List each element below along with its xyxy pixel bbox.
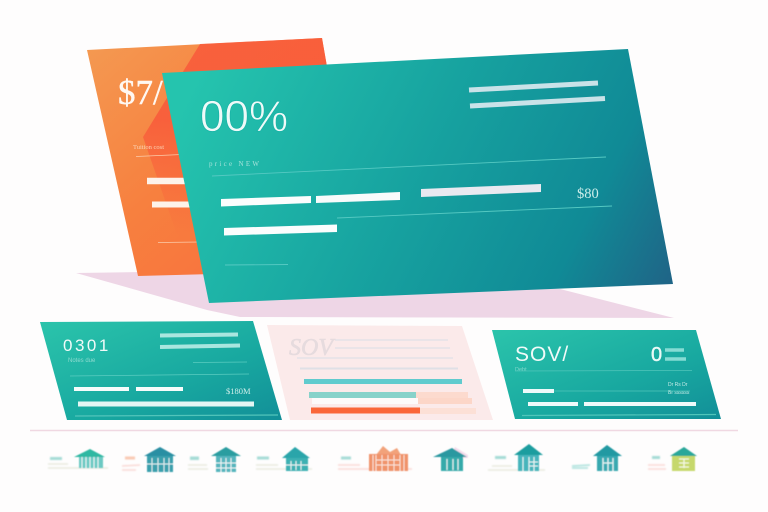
- pink floor shadow: [76, 271, 674, 318]
- orange card bars: [136, 154, 200, 242]
- icon: orange building 5: [369, 446, 408, 471]
- orange card price: $7/: [118, 73, 163, 112]
- icon row: houses: [74, 444, 697, 472]
- right card side value: 0: [651, 344, 662, 366]
- baseline divider: [30, 430, 738, 432]
- left card caption: Notes due: [68, 358, 96, 364]
- panel: pale pink card middle: [267, 325, 493, 420]
- main card percent value: 00%: [200, 92, 288, 141]
- left card dividers: [70, 362, 278, 416]
- right card detail text two: Br ssssss: [668, 390, 690, 396]
- icon: house 6 with pink blur: [433, 447, 468, 471]
- icon: bank building 1: [74, 449, 105, 468]
- icon: house 8: [593, 445, 622, 471]
- right card number: SOV/: [515, 343, 569, 366]
- icon: house 2: [144, 447, 176, 472]
- panel: orange back card: [87, 38, 360, 276]
- panel: small teal card right: [492, 330, 721, 419]
- left card number: 0301: [63, 336, 111, 355]
- pale card heading: SOV: [289, 335, 335, 361]
- main card amount: $80: [577, 186, 599, 202]
- icon: yellow-green house 9: [670, 447, 697, 471]
- icon: house 7: [514, 444, 543, 471]
- main card top lines: [469, 83, 605, 106]
- main card white bars: [221, 184, 541, 236]
- icon: house 3: [211, 447, 241, 472]
- orange card caption: Tuition cost: [133, 144, 164, 151]
- panel: small teal card left: [40, 321, 282, 420]
- main card caption: price NEW: [209, 160, 259, 168]
- left card white bars: [74, 389, 254, 404]
- right card short bars: [665, 350, 686, 359]
- left card amount: $180M: [226, 386, 251, 396]
- icon: house 4: [282, 447, 310, 471]
- right card white bars: [523, 391, 696, 404]
- pale card grey lines: [297, 340, 458, 368]
- right card dividers: [515, 370, 716, 416]
- pale card progress bars: [304, 382, 476, 414]
- main card dividers: [212, 157, 612, 265]
- panel: main teal card: [162, 49, 673, 303]
- right card caption: Debt: [515, 367, 527, 373]
- legend rows beside houses: [48, 456, 666, 470]
- right card detail text: Dr Rs Dr: [668, 382, 688, 388]
- left card top lines: [160, 334, 240, 347]
